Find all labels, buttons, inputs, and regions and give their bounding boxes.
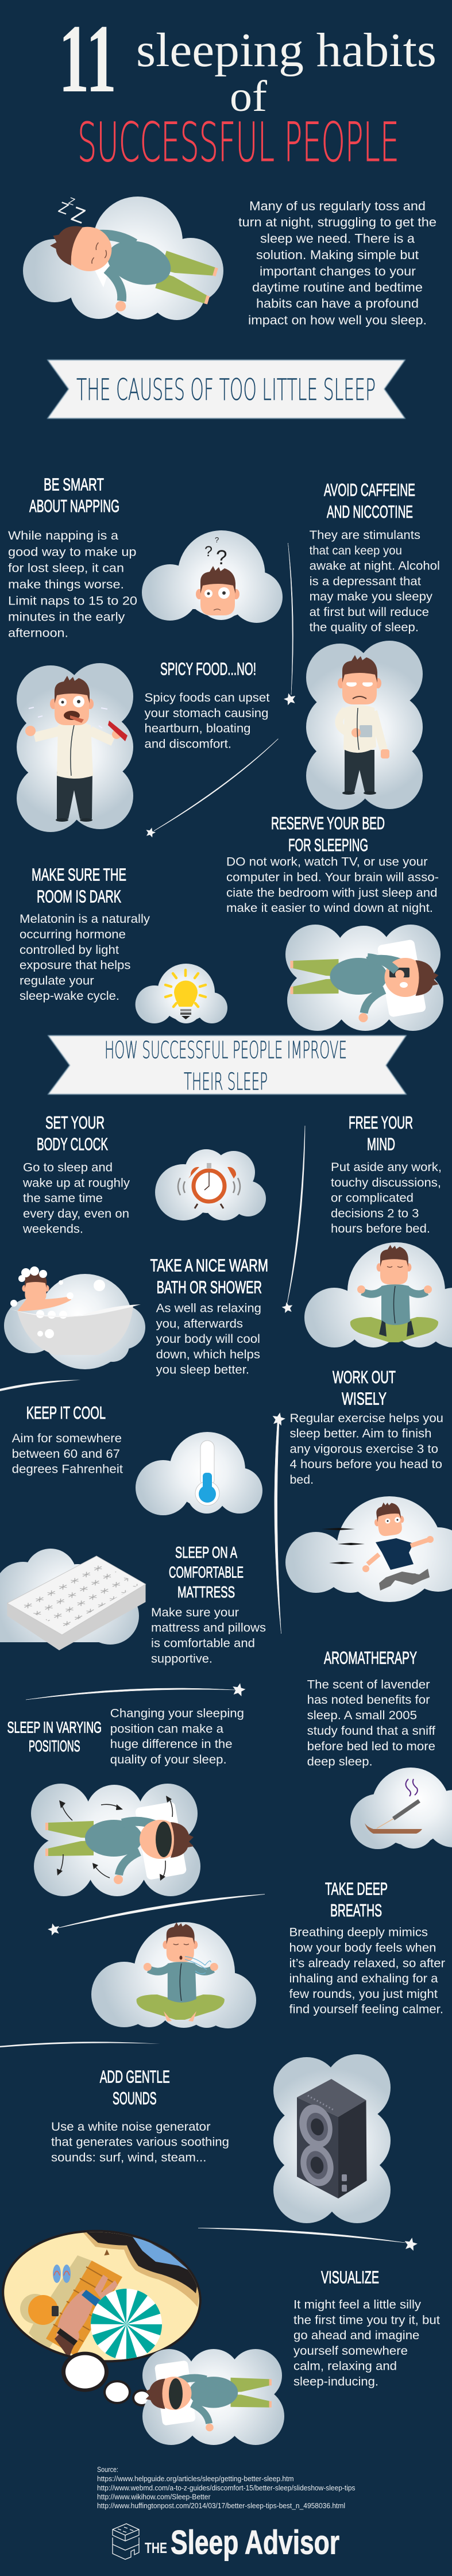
banner: how successful people improve their sleep bbox=[48, 1035, 406, 1095]
text block: hours before bed. bbox=[331, 1222, 430, 1235]
heading: ROOM IS DARK bbox=[37, 886, 121, 906]
text block: is a depressant that bbox=[310, 574, 421, 588]
text block: 4 hours before you head to bbox=[289, 1457, 442, 1471]
text block: deep sleep. bbox=[307, 1755, 373, 1769]
text block bbox=[289, 1411, 443, 1487]
heading bbox=[333, 1367, 396, 1409]
panel: take a nice warm bath or shower bbox=[4, 1256, 268, 1377]
shooting star bbox=[0, 1380, 80, 1391]
text block: how your body feels when bbox=[289, 1941, 436, 1955]
panel: take deep breaths bbox=[91, 1879, 445, 2028]
text block: few rounds, you just might bbox=[289, 1987, 438, 2001]
logo: the sleep advisor: Sleep Advisor bbox=[171, 2524, 339, 2562]
panel: be smart about napping bbox=[8, 474, 283, 640]
text block bbox=[110, 1707, 244, 1766]
text block: Aim for somewhere bbox=[12, 1431, 122, 1445]
title: sleeping habits: sleeping habits bbox=[136, 24, 436, 77]
heading: FOR SLEEPING bbox=[288, 835, 368, 855]
shooting star bbox=[145, 739, 278, 838]
text block: Changing your sleeping bbox=[110, 1707, 244, 1720]
panel: set your body clock bbox=[22, 1112, 266, 1236]
text block: supportive. bbox=[151, 1651, 213, 1665]
text block bbox=[307, 1677, 435, 1769]
text block: exposure that helps bbox=[20, 958, 130, 972]
panel: free your mind bbox=[304, 1112, 452, 1347]
text block: before bed led to more bbox=[307, 1739, 435, 1753]
heading bbox=[32, 864, 126, 906]
panel: sleep in varying positions bbox=[7, 1707, 244, 1896]
text block: find yourself feeling calmer. bbox=[289, 2003, 443, 2016]
text block: They are stimulants bbox=[310, 528, 420, 542]
heading: BE SMART bbox=[44, 474, 104, 494]
text block: While napping is a bbox=[8, 529, 118, 542]
intro paragraph: impact on how well you sleep. bbox=[248, 313, 427, 327]
panel: spicy food bbox=[17, 659, 270, 832]
intro paragraph: solution. Making simple but bbox=[256, 248, 419, 262]
heading: ADD GENTLE bbox=[100, 2067, 170, 2087]
heading: ABOUT NAPPING bbox=[29, 496, 119, 516]
source list: http://www.wikihow.com/Sleep-Better bbox=[97, 2493, 210, 2501]
heading bbox=[271, 813, 385, 855]
text block: regulate your bbox=[20, 973, 94, 987]
text block: Use a white noise generator bbox=[51, 2120, 210, 2134]
text block bbox=[289, 1926, 445, 2016]
text block: It might feel a little silly bbox=[293, 2298, 421, 2312]
text block: sleep-wake cycle. bbox=[20, 989, 119, 1003]
text block: occurring hormone bbox=[20, 927, 126, 941]
text block: bed. bbox=[289, 1473, 314, 1487]
heading bbox=[325, 1879, 388, 1920]
intro paragraph: sleep we need. There is a bbox=[260, 231, 415, 245]
text block: yourself somewhere bbox=[293, 2344, 408, 2358]
heading: WISELY bbox=[342, 1389, 387, 1409]
heading bbox=[7, 1718, 102, 1755]
icon: sleeping man on a cloud bbox=[23, 195, 223, 335]
heading: TAKE DEEP bbox=[325, 1879, 388, 1899]
panel: reserve your bed for sleeping bbox=[226, 813, 443, 1031]
heading: SOUNDS bbox=[113, 2088, 157, 2108]
text block: mattress and pillows bbox=[151, 1621, 266, 1635]
text block: ciate the bedroom with just sleep and bbox=[226, 885, 438, 899]
heading bbox=[37, 1112, 108, 1154]
icon: confused head on a cloud: ? bbox=[215, 536, 219, 544]
shooting star bbox=[26, 1682, 246, 1700]
text block: decisions 2 to 3 bbox=[331, 1206, 419, 1220]
text block: at first but will reduce bbox=[310, 605, 429, 619]
heading: RESERVE YOUR BED bbox=[271, 813, 385, 833]
source list: http://www.webmd.com/a-to-z-guides/discomfort-15/better-sleep/slideshow-sleep-tips bbox=[97, 2484, 355, 2492]
text block bbox=[12, 1431, 123, 1476]
text block bbox=[310, 528, 440, 634]
heading bbox=[324, 480, 415, 522]
text block bbox=[51, 2120, 229, 2165]
banner: how successful people improve their sleep: THEIR SLEEP bbox=[184, 1068, 268, 1095]
icon: man sleeping with mask on a cloud bbox=[142, 2349, 284, 2445]
panel: add gentle sounds bbox=[51, 2054, 391, 2223]
logo: the sleep advisor bbox=[113, 2524, 339, 2562]
icon: incense burner on a cloud bbox=[350, 1768, 452, 1849]
shooting star bbox=[198, 2228, 419, 2251]
text block: the first time you try it, but bbox=[293, 2313, 440, 2327]
text block: has noted benefits for bbox=[307, 1693, 430, 1707]
icon: man in bathtub on a cloud bbox=[4, 1266, 145, 1369]
icon: alarm clock on a cloud bbox=[155, 1149, 266, 1220]
logo wordmark: THE bbox=[145, 2539, 167, 2556]
heading: BREATHS bbox=[330, 1900, 382, 1920]
heading bbox=[100, 2067, 170, 2108]
icon: sleeping man on a cloud: Z bbox=[56, 198, 71, 218]
heading bbox=[349, 1112, 413, 1154]
icon: tired man with coffee mug on a cloud bbox=[306, 641, 423, 810]
text block: may make you sleepy bbox=[310, 590, 432, 603]
icon: confused head on a cloud: ? bbox=[216, 546, 227, 569]
text block: it’s already relaxed, so after bbox=[289, 1956, 445, 1970]
heading: BODY CLOCK bbox=[37, 1134, 108, 1154]
heading: SLEEP ON A bbox=[175, 1543, 237, 1561]
heading: POSITIONS bbox=[29, 1737, 80, 1755]
icon: confused head on a cloud: ? bbox=[204, 544, 213, 560]
text block: Limit naps to 15 to 20 bbox=[8, 594, 137, 607]
panel: make sure the room is dark bbox=[20, 864, 227, 1023]
icon: stacked mattress logo bbox=[113, 2524, 139, 2559]
text block bbox=[8, 529, 137, 640]
icon: sleeping man on a cloud: Z bbox=[68, 202, 88, 228]
text block: sounds: surf, wind, steam... bbox=[51, 2151, 206, 2165]
panel: avoid caffeine and nicotine bbox=[306, 480, 440, 810]
intro paragraph: daytime routine and bedtime bbox=[252, 280, 423, 294]
text block: sleep better. Aim to finish bbox=[289, 1427, 432, 1441]
text block bbox=[156, 1301, 261, 1377]
icon: man breathing on a cloud bbox=[91, 1922, 256, 2028]
intro paragraph bbox=[238, 199, 436, 327]
text block bbox=[145, 691, 270, 750]
text block bbox=[20, 912, 150, 1003]
text block: controlled by light bbox=[20, 943, 119, 957]
text block: make things worse. bbox=[8, 577, 124, 591]
text block bbox=[293, 2298, 440, 2388]
intro paragraph: habits can have a profound bbox=[256, 297, 419, 311]
heading bbox=[29, 474, 119, 516]
panel: intro bbox=[23, 195, 436, 335]
text block: inhaling and exhaling for a bbox=[289, 1972, 438, 1985]
text block: As well as relaxing bbox=[156, 1301, 261, 1315]
text block: down, which helps bbox=[156, 1347, 260, 1361]
text block: Go to sleep and bbox=[23, 1161, 113, 1175]
text block: every day, even on bbox=[23, 1207, 129, 1220]
text block: is comfortable and bbox=[151, 1637, 255, 1650]
text block: afternoon. bbox=[8, 626, 68, 640]
text block: sleep. A small 2005 bbox=[307, 1708, 417, 1722]
heading: MIND bbox=[367, 1134, 395, 1154]
heading: KEEP IT COOL bbox=[26, 1403, 106, 1423]
text block: huge difference in the bbox=[110, 1737, 233, 1751]
text block: Regular exercise helps you bbox=[289, 1411, 443, 1425]
icon: confused head on a cloud bbox=[142, 530, 283, 623]
heading: MATTRESS bbox=[177, 1583, 235, 1601]
text block: computer in bed. Your brain will asso- bbox=[226, 870, 439, 884]
heading: FREE YOUR bbox=[349, 1112, 413, 1133]
heading: TAKE A NICE WARM bbox=[150, 1256, 268, 1276]
source list: Source: bbox=[97, 2466, 118, 2474]
heading: SET YOUR bbox=[45, 1112, 105, 1133]
text block: weekends. bbox=[22, 1222, 83, 1236]
text block: your body will cool bbox=[156, 1332, 260, 1346]
heading: SLEEP IN VARYING bbox=[7, 1718, 102, 1736]
panel: keep it cool bbox=[12, 1403, 262, 1515]
heading: WORK OUT bbox=[333, 1367, 396, 1387]
text block: or complicated bbox=[331, 1191, 414, 1205]
text block: degrees Fahrenheit bbox=[12, 1462, 123, 1476]
text block: sleep-inducing. bbox=[293, 2374, 378, 2388]
shooting star bbox=[271, 1411, 287, 1634]
text block: Breathing deeply mimics bbox=[289, 1926, 428, 1939]
banner: the causes of too little sleep bbox=[48, 360, 405, 418]
icon: sleeping man on a cloud: Z bbox=[67, 195, 76, 207]
heading: BATH OR SHOWER bbox=[157, 1277, 262, 1297]
heading bbox=[169, 1543, 244, 1601]
text block bbox=[226, 855, 439, 915]
text block: Make sure your bbox=[151, 1605, 239, 1619]
text block: The scent of lavender bbox=[307, 1677, 430, 1691]
heading bbox=[150, 1256, 268, 1297]
panel: visualize bbox=[0, 2223, 440, 2445]
icon: man on phone in bed on a cloud bbox=[285, 925, 443, 1031]
heading: SPICY FOOD...NO! bbox=[160, 659, 256, 679]
icon: meditating man on a cloud bbox=[304, 1242, 452, 1347]
icon: speaker on a cloud bbox=[273, 2054, 391, 2223]
source list: https://www.helpguide.org/articles/sleep/getting-better-sleep.htm bbox=[97, 2475, 294, 2483]
intro paragraph: turn at night, struggling to get the bbox=[238, 215, 436, 229]
text block bbox=[331, 1160, 442, 1235]
shooting star bbox=[281, 1126, 305, 1314]
text block: calm, relaxing and bbox=[293, 2359, 397, 2373]
text block: DO not work, watch TV, or use your bbox=[226, 855, 427, 869]
shooting star bbox=[0, 2042, 160, 2047]
text block: that generates various soothing bbox=[51, 2135, 229, 2149]
text block: touchy discussions, bbox=[331, 1176, 441, 1189]
text block: position can make a bbox=[110, 1722, 223, 1735]
shooting star bbox=[47, 1894, 265, 1936]
title bbox=[59, 5, 436, 174]
text block: Melatonin is a naturally bbox=[20, 912, 150, 926]
icon: thermometer on a cloud bbox=[136, 1432, 262, 1515]
text block: that can keep you bbox=[310, 544, 402, 557]
text block: awake at night. Alcohol bbox=[310, 559, 440, 572]
icon: man with sleep mask and arrows on a cloud bbox=[31, 1784, 200, 1896]
icon: running man on a cloud bbox=[285, 1496, 452, 1602]
heading: VISUALIZE bbox=[321, 2267, 379, 2288]
text block: quality of your sleep. bbox=[110, 1753, 227, 1766]
intro paragraph: Many of us regularly toss and bbox=[249, 199, 426, 213]
text block: for lost sleep, it can bbox=[8, 561, 124, 575]
text block: Put aside any work, bbox=[331, 1160, 442, 1174]
text block: your stomach causing bbox=[145, 706, 269, 720]
text block: the quality of sleep. bbox=[310, 621, 419, 634]
panel: work out wisely bbox=[285, 1367, 452, 1602]
intro paragraph: important changes to your bbox=[260, 264, 416, 278]
text block: any vigorous exercise 3 to bbox=[289, 1442, 438, 1456]
title: number eleven: 11 bbox=[59, 5, 117, 113]
text block: you sleep better. bbox=[156, 1363, 249, 1377]
text block bbox=[22, 1161, 130, 1236]
source list bbox=[97, 2466, 355, 2510]
text block: minutes in the early bbox=[8, 610, 125, 624]
source list: http://www.huffingtonpost.com/2014/03/17/better-sleep-tips-best_n_4958036.html bbox=[97, 2502, 345, 2510]
text block: make it easier to wind down at night. bbox=[226, 901, 433, 915]
heading: MAKE SURE THE bbox=[32, 864, 126, 885]
text block: you, afterwards bbox=[156, 1316, 243, 1330]
text block: good way to make up bbox=[8, 545, 137, 559]
text block: between 60 and 67 bbox=[12, 1447, 120, 1461]
icon: light bulb on a cloud bbox=[136, 964, 227, 1023]
text block: go ahead and imagine bbox=[293, 2328, 419, 2342]
text block: the same time bbox=[23, 1191, 103, 1205]
title: of: of bbox=[230, 72, 268, 121]
icon: mattress on a cloud bbox=[0, 1549, 146, 1650]
text block: and discomfort. bbox=[145, 737, 231, 750]
heading: COMFORTABLE bbox=[169, 1563, 244, 1581]
text block bbox=[151, 1605, 266, 1665]
panel: sleep on a comfortable mattress bbox=[0, 1543, 266, 1665]
panel: aromatherapy bbox=[307, 1648, 452, 1849]
text block: Spicy foods can upset bbox=[145, 691, 270, 704]
icon: thought bubble with beach scene bbox=[2, 2230, 202, 2363]
icon: man eating chili on a cloud bbox=[17, 663, 133, 832]
text block: heartburn, bloating bbox=[145, 722, 250, 736]
icon: thought bubble tail circles bbox=[61, 2352, 152, 2406]
text block: study found that a sniff bbox=[307, 1724, 435, 1738]
text block: wake up at roughly bbox=[22, 1176, 130, 1189]
shooting star bbox=[283, 543, 297, 706]
